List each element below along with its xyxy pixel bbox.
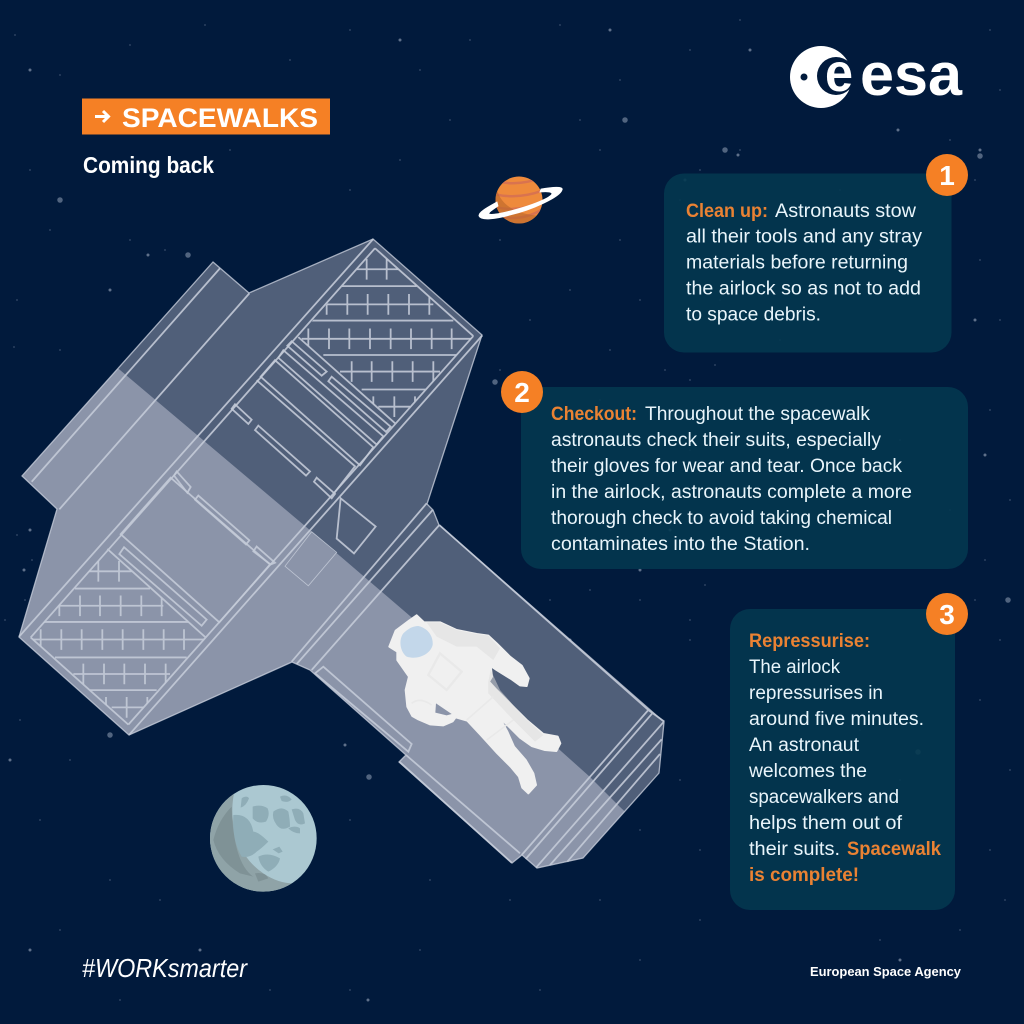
panel: step 1 clean up: the airlock so as not to add xyxy=(686,278,921,300)
solar panel lower hatch xyxy=(32,561,204,718)
title tag: SPACEWALKS xyxy=(122,103,318,133)
panel: step 3 repressurise: repressurises in xyxy=(749,683,883,704)
panel: step 2 checkout: contaminates into the Station. xyxy=(551,534,810,555)
panel: step 1 clean up: Astronauts stow xyxy=(775,201,916,222)
panel: step 2 checkout: Checkout: xyxy=(551,403,637,425)
panel: step 2 checkout: their gloves for wear and tear. Once back xyxy=(551,456,902,477)
module lines xyxy=(292,503,664,868)
station airlock structure xyxy=(18,238,665,869)
ESA logo: esa xyxy=(860,41,963,108)
badge 1 xyxy=(926,154,968,196)
astronaut xyxy=(389,615,560,793)
icon: ringed planet xyxy=(479,176,562,228)
title tag xyxy=(82,98,330,134)
helmet visor xyxy=(400,626,433,658)
panel: step 1 clean up xyxy=(664,154,968,352)
hashtag: #WORKsmarter xyxy=(82,953,248,983)
panel: step 1 clean up: all their tools and any stray xyxy=(686,226,923,248)
icon: moon xyxy=(210,785,317,892)
ESA logo: e xyxy=(825,43,853,103)
panel: step 2 checkout: thorough check to avoid taking chemical xyxy=(551,508,892,529)
panel: step 3 repressurise: The airlock xyxy=(749,657,840,678)
panel: step 3 repressurise xyxy=(730,593,968,910)
badge 1: 1 xyxy=(939,160,955,191)
panel: step 3 repressurise: welcomes the xyxy=(748,761,867,782)
panel: step 1 clean up: Clean up: xyxy=(686,200,768,222)
panel: step 3 repressurise: Repressurise: xyxy=(749,630,870,652)
panel: step 1 clean up: materials before returning xyxy=(686,252,908,274)
panel: step 3 repressurise: Spacewalk xyxy=(847,838,941,860)
station frame and panel lines xyxy=(19,239,482,735)
panel: step 3 repressurise: spacewalkers and xyxy=(749,787,899,808)
panel: step 2 checkout xyxy=(501,371,968,569)
panel: step 1 clean up: to space debris. xyxy=(686,304,821,326)
panel: step 3 repressurise: is complete! xyxy=(749,864,859,886)
panel: step 2 checkout: astronauts check their suits, especially xyxy=(551,430,881,451)
panel: step 2 checkout: Throughout the spacewalk xyxy=(645,404,870,425)
badge 3: 3 xyxy=(939,599,955,630)
solar panel upper hatch xyxy=(302,259,472,417)
subtitle: Coming back xyxy=(83,152,214,178)
ESA logo xyxy=(790,41,963,108)
badge 3 xyxy=(926,593,968,635)
panel: step 2 checkout: in the airlock, astronauts complete a more xyxy=(551,482,912,503)
panel: step 3 repressurise: An astronaut xyxy=(749,735,860,756)
panel: step 3 repressurise: helps them out of xyxy=(749,813,903,834)
badge 2 xyxy=(501,371,543,413)
credit: European Space Agency xyxy=(810,965,961,979)
panel: step 3 repressurise: their suits. xyxy=(749,839,840,860)
badge 2: 2 xyxy=(514,377,530,408)
panel: step 3 repressurise: around five minutes. xyxy=(749,709,924,730)
